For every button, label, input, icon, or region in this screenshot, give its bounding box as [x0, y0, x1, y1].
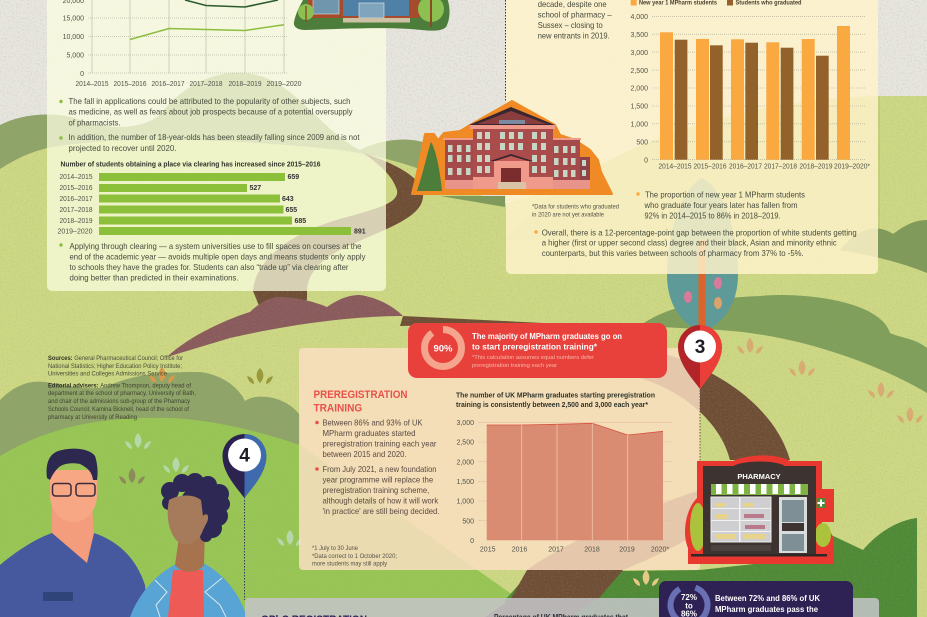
- bar chart: students vs graduates: 2014–2015: [658, 164, 692, 170]
- area chart: graduates starting training: training is consistently between 2,500 and 3,000 each year*: [456, 400, 648, 409]
- text: attainment gap: a higher (first or upper second class) degree and their black, Asian and minority ethnic: [542, 238, 837, 248]
- text: applications bullets: The fall in applications could be attributed to the popularity of other subjects, such: [68, 96, 351, 106]
- bar chart: students vs graduates: 1,000: [630, 122, 648, 128]
- line chart: applications: 2017–2018: [190, 81, 223, 88]
- text: pass rates: MPharm graduates pass the: [715, 605, 819, 614]
- text: attainment gap: counterparts, but this varies between schools of pharmacy from 37% to -5%.: [542, 248, 804, 258]
- ring: 72 to 86%: [665, 581, 713, 617]
- text: sources and editorial advisers: Schools Council; Kamina Bicknell, head of the school of: [48, 407, 189, 413]
- text: school of pharmacy intro: new entrants in 2019.: [538, 30, 610, 40]
- heading: preregistration training: PREREGISTRATION: [314, 389, 408, 401]
- text: applications bullets: In addition, the number of 18-year-olds has been steadily falling since 2009 and is not: [68, 132, 360, 142]
- bar chart: clearing places: 2016–2017: [60, 196, 93, 203]
- area chart: graduates starting training: 0: [470, 538, 474, 545]
- tree behind right panel: [667, 178, 738, 332]
- area chart: graduates starting training: 1,500: [456, 479, 474, 486]
- text: training bullets: 'in practice' are still being decided.: [322, 506, 440, 516]
- text: applications bullets: projected to recover until 2020.: [68, 143, 176, 153]
- chart legend: Students who graduated: [736, 0, 802, 6]
- text: sources and editorial advisers: department at the school of pharmacy, University of Bath,: [48, 391, 196, 397]
- area chart: graduates starting training: The number of UK MPharm graduates starting preregistration: [456, 390, 655, 400]
- text: applications bullets: of pharmacists.: [68, 117, 120, 127]
- dotted route line: [504, 0, 506, 102]
- pin 4: 4: [239, 446, 250, 466]
- line chart: applications: 2016–2017: [152, 81, 185, 88]
- icon: university building: [412, 101, 612, 194]
- bar chart: students vs graduates: 2017–2018: [764, 164, 797, 170]
- icon: library building: [294, 0, 450, 31]
- area chart: graduates starting training: 2017: [548, 546, 564, 554]
- text: clearing bullet: end of the academic year — avoids multiple open days and means students only apply: [70, 251, 366, 261]
- text: training bullets: preregistration training each year: [322, 438, 437, 448]
- heading: preregistration training: [314, 389, 408, 414]
- footnotes: preregistration: [312, 546, 397, 568]
- pin 4: [222, 434, 266, 600]
- panel: preregistration training: [299, 348, 700, 570]
- text: sources and editorial advisers: National Statistics; Higher Education Policy Institute;: [48, 364, 182, 370]
- bar chart: students vs graduates: [630, 14, 870, 170]
- line chart: applications: 10,000: [63, 34, 84, 41]
- text: graduation proportion: The proportion of new year 1 MPharm students: [645, 190, 805, 200]
- callout: 72 to 86 per cent: [659, 581, 853, 617]
- text: training bullets: preregistration training scheme,: [322, 485, 429, 495]
- bar chart: students vs graduates: 2,000: [630, 86, 648, 93]
- text: majority go on: preregistration training each year: [472, 363, 557, 369]
- text: clearing bullet: doing better than predicted in their examinations.: [70, 272, 238, 282]
- footnote: graduate data: *Data for students who graduated: [532, 204, 619, 210]
- ring: 90%: [424, 330, 462, 366]
- icon: pharmacy shop: [685, 455, 834, 564]
- ring: 72 to 86%: to: [685, 602, 693, 610]
- line chart: applications: [63, 0, 302, 88]
- footnotes: preregistration: *1 July to 30 June: [312, 546, 359, 552]
- chart legend: [631, 0, 802, 6]
- icon: pharmacy shop: PHARMACY: [737, 472, 781, 481]
- bar chart: clearing places: 527: [250, 185, 261, 192]
- bar chart: students vs graduates: 2016–2017: [729, 164, 762, 170]
- panel: applications and clearing: [47, 0, 386, 291]
- area chart: graduates starting training: 2016: [512, 546, 527, 554]
- text: sources and editorial advisers: [48, 356, 196, 421]
- bar chart: clearing places: 2017–2018: [60, 207, 93, 214]
- bar chart: students vs graduates: 2019–2020*: [834, 164, 870, 170]
- bar chart: clearing places: 2015–2016: [60, 185, 93, 192]
- area chart: graduates starting training: 2,500: [456, 440, 474, 447]
- bar chart: clearing places: 685: [294, 218, 306, 225]
- text: training bullets: From July 2021, a new foundation: [322, 464, 437, 474]
- footnotes: preregistration: *Data correct to 1 October 2020;: [312, 554, 397, 560]
- area chart: graduates starting training: 2018: [584, 546, 600, 554]
- bar chart: students vs graduates: 0: [644, 157, 648, 164]
- text: training bullets: although details of how it will work: [322, 496, 439, 506]
- line chart: applications: 0: [80, 71, 84, 78]
- text: sources and editorial advisers: and chair of the admissions sub-group of the Pharmacy: [48, 399, 190, 405]
- area chart: graduates starting training: 2,000: [456, 459, 474, 466]
- text: attainment gap: Overall, there is a 12-percentage-point gap between the proportion of white students getting: [542, 227, 857, 237]
- bar chart: students vs graduates: 1,500: [630, 104, 648, 111]
- bar chart: clearing places: Number of students obtaining a place via clearing has increased since 2015–2016: [60, 159, 320, 168]
- bar chart: students vs graduates: 3,000: [630, 50, 648, 57]
- line chart: applications: 5,000: [66, 52, 84, 60]
- bar chart: students vs graduates: 3,500: [630, 32, 648, 39]
- bar chart: clearing places: 659: [288, 174, 299, 181]
- ring: 90%: 90%: [433, 344, 453, 354]
- ring: 72 to 86%: 72%: [681, 593, 697, 602]
- text: training bullets: MPharm graduates started: [322, 428, 416, 438]
- panel: GPhC registration: [245, 598, 879, 617]
- text: pass rates: [715, 594, 820, 617]
- text: clearing bullet: to schools they have the grades for. Students can also “trade up” via clearing after: [70, 262, 349, 272]
- bar chart: students vs graduates: 2018–2019: [800, 164, 833, 170]
- text: school of pharmacy intro: [538, 0, 612, 40]
- area chart: graduates starting training: 3,000: [456, 420, 474, 427]
- text: school of pharmacy intro: Sussex – closing to: [538, 20, 603, 30]
- text: majority go on: The majority of MPharm graduates go on: [472, 332, 622, 341]
- chart legend: New year 1 MPharm students: [639, 0, 718, 6]
- heading: preregistration training: TRAINING: [314, 402, 362, 414]
- text: clearing bullet: [59, 241, 366, 282]
- text: sources and editorial advisers: pharmacy at University of Reading: [48, 415, 137, 421]
- text: training bullets: year programme will replace the: [322, 475, 433, 485]
- bar chart: clearing places: 2014–2015: [60, 174, 93, 181]
- illustration: female pharmacist: [130, 473, 247, 617]
- illustration: male pharmacist: [0, 449, 148, 617]
- text: graduation proportion: [636, 190, 805, 220]
- bar chart: clearing places: 643: [282, 196, 294, 203]
- text: graduation proportion: 92% in 2014–2015 to 86% in 2018–2019.: [644, 210, 780, 220]
- bar chart: clearing places: 891: [354, 228, 366, 236]
- text: majority go on: *This calculation assumes equal numbers defer: [472, 355, 594, 361]
- bar chart: clearing places: 2018–2019: [60, 218, 93, 225]
- bar chart: students vs graduates: 2,500: [630, 68, 648, 75]
- bar chart: students vs graduates: 500: [636, 140, 648, 146]
- callout: 90 per cent: [408, 323, 667, 378]
- text: graduation proportion: who graduate four years later has fallen from: [644, 200, 798, 210]
- text: school of pharmacy intro: school of pharmacy –: [538, 10, 612, 20]
- text: pass rates: Between 72% and 86% of UK: [715, 594, 820, 603]
- area chart: graduates starting training: [456, 390, 672, 554]
- footnote: graduate data: in 2020 are not yet available: [532, 213, 605, 219]
- panel: MPharm students and graduates: [506, 0, 878, 274]
- area chart: graduates starting training: 2019: [619, 546, 635, 554]
- bar chart: students vs graduates: 2015–2016: [694, 164, 727, 170]
- text: majority go on: to start preregistration training*: [472, 342, 598, 352]
- footnotes: preregistration: more students may still apply: [312, 562, 387, 568]
- area chart: graduates starting training: 2015: [480, 546, 496, 554]
- bar chart: clearing places: [58, 159, 366, 236]
- text: majority go on: [472, 332, 622, 369]
- text: training bullets: between 2015 and 2020.: [322, 449, 406, 459]
- pin 3: 3: [695, 337, 705, 358]
- footnote: graduate data: [532, 204, 619, 219]
- text: sources and editorial advisers: Editorial advisers: Andrew Thompson, deputy head of: [48, 384, 191, 390]
- text: attainment gap: [534, 227, 857, 258]
- text: sources and editorial advisers: Universities and Colleges Admissions Service: [48, 372, 168, 378]
- text: clearing bullet: Applying through clearing — a system universities use to fill spaces on courses at the: [70, 241, 362, 251]
- area chart: graduates starting training: 1,000: [456, 499, 474, 506]
- line chart: applications: 2015–2016: [114, 81, 147, 88]
- area chart: graduates starting training: 500: [462, 518, 474, 525]
- text: applications bullets: as medicine, as well as fears about job prospects because of a potential oversupply: [68, 107, 353, 117]
- line chart: applications: 2019–2020: [266, 81, 302, 88]
- bar chart: clearing places: 2019–2020: [58, 228, 93, 236]
- text: sources and editorial advisers: Sources: General Pharmaceutical Council; Office for: [48, 356, 183, 362]
- line chart: applications: 2018–2019: [228, 81, 262, 88]
- area chart: graduates starting training: 2020*: [651, 546, 669, 554]
- text: training bullets: Between 86% and 93% of UK: [322, 418, 423, 428]
- text: applications bullets: [59, 96, 360, 153]
- bar chart: clearing places: 655: [286, 207, 297, 214]
- line chart: applications: 2014–2015: [76, 81, 109, 88]
- text: training bullets: [315, 418, 440, 516]
- line chart: applications: 15,000: [63, 16, 84, 22]
- bar chart: students vs graduates: 4,000: [630, 14, 648, 21]
- pin 3: [678, 325, 722, 462]
